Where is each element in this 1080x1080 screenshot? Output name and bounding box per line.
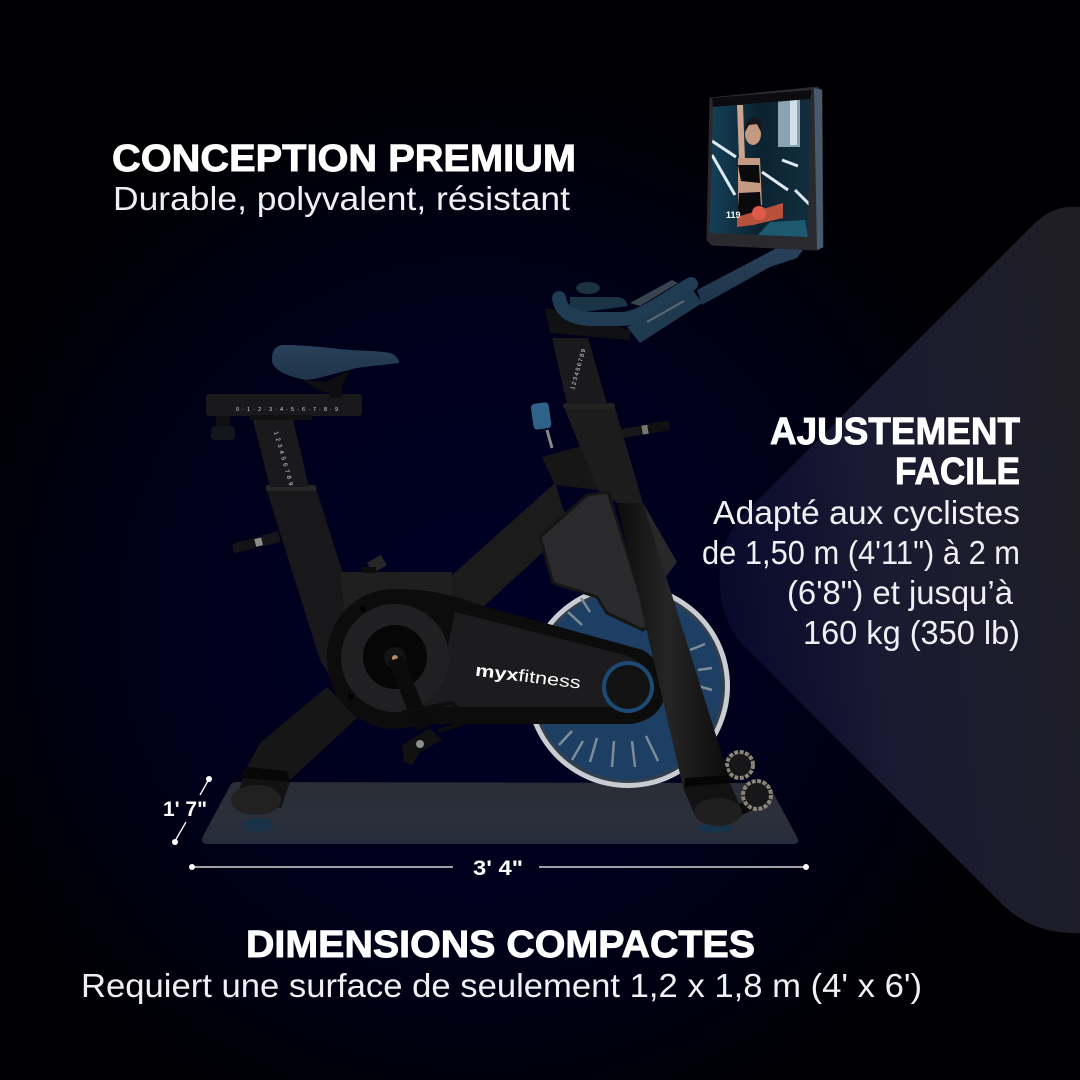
logo myxfitness: myx fitness [474,661,582,693]
brake knob [530,402,552,448]
seat rail [206,394,362,440]
rear transport wheels [724,752,771,815]
top beam [340,572,452,612]
rear foot [231,778,290,815]
seat post: 1 2 3 4 5 6 7 8 9 [272,431,293,487]
head tube sleeve [563,405,643,503]
handlebar clamp [545,308,630,340]
seat rail: 0 · 1 · 2 · 3 · 4 · 5 · 6 · 7 · 8 · 9 [236,407,338,413]
crank disk [341,604,449,712]
heading: ajustement facile: de 1,50 m (4'11") à 2 m [702,534,1020,571]
side plate [540,492,650,630]
rear leg [242,687,358,782]
dimension: depth 1' 7": 1' 7" [163,798,207,821]
rear foot pad [242,818,274,832]
small beam knob [362,555,387,573]
adjust box [542,445,598,490]
seat tube [266,485,348,685]
heading: conception premium: Durable, polyvalent, résistant [113,180,570,217]
dimension: width 3' 4": 3' 4" [473,857,523,880]
small pulley cap [602,661,654,713]
tablet screen: 119 [726,210,741,220]
heading: ajustement facile: Adapté aux cyclistes [713,494,1020,531]
tablet [705,87,823,250]
front foot [683,783,742,826]
heading: ajustement facile: AJUSTEMENT [770,411,1020,453]
heading: ajustement facile: FACILE [895,451,1020,493]
seat adjuster knob [231,531,281,553]
front foot pad [698,823,732,833]
upper handlebar post [552,338,607,404]
heading: dimensions compactes: Requiert une surface de seulement 1,2 x 1,8 m (4' x 6') [81,967,922,1004]
down tube [450,483,570,607]
seat post [253,420,309,487]
saddle [272,345,399,380]
chain case [327,589,666,729]
floor mat [202,782,798,844]
dimension: depth 1' 7" [163,776,212,845]
heading: conception premium [112,138,576,217]
head tube [563,403,730,790]
heading: dimensions compactes [81,924,922,1004]
heading: ajustement facile [702,411,1020,651]
heading: dimensions compactes: DIMENSIONS COMPACTES [246,924,755,966]
flywheel [526,584,730,788]
dimension: width 3' 4" [189,857,809,880]
rear shroud [643,503,677,590]
saddle support [303,370,350,398]
heading: conception premium: CONCEPTION PREMIUM [112,138,576,180]
heading: ajustement facile: 160 kg (350 lb) [803,614,1020,651]
panel: diagonal rounded background shape [720,207,1080,933]
crank and pedal [388,656,462,765]
handlebars [545,280,702,343]
front pop pin [622,420,670,438]
tablet screen [710,99,810,237]
heading: ajustement facile: (6'8") et jusqu’à [787,574,1014,611]
upper handlebar post: 1 2 3 4 5 6 7 8 9 [570,348,588,391]
bike [206,87,823,833]
tablet arm [697,248,803,305]
